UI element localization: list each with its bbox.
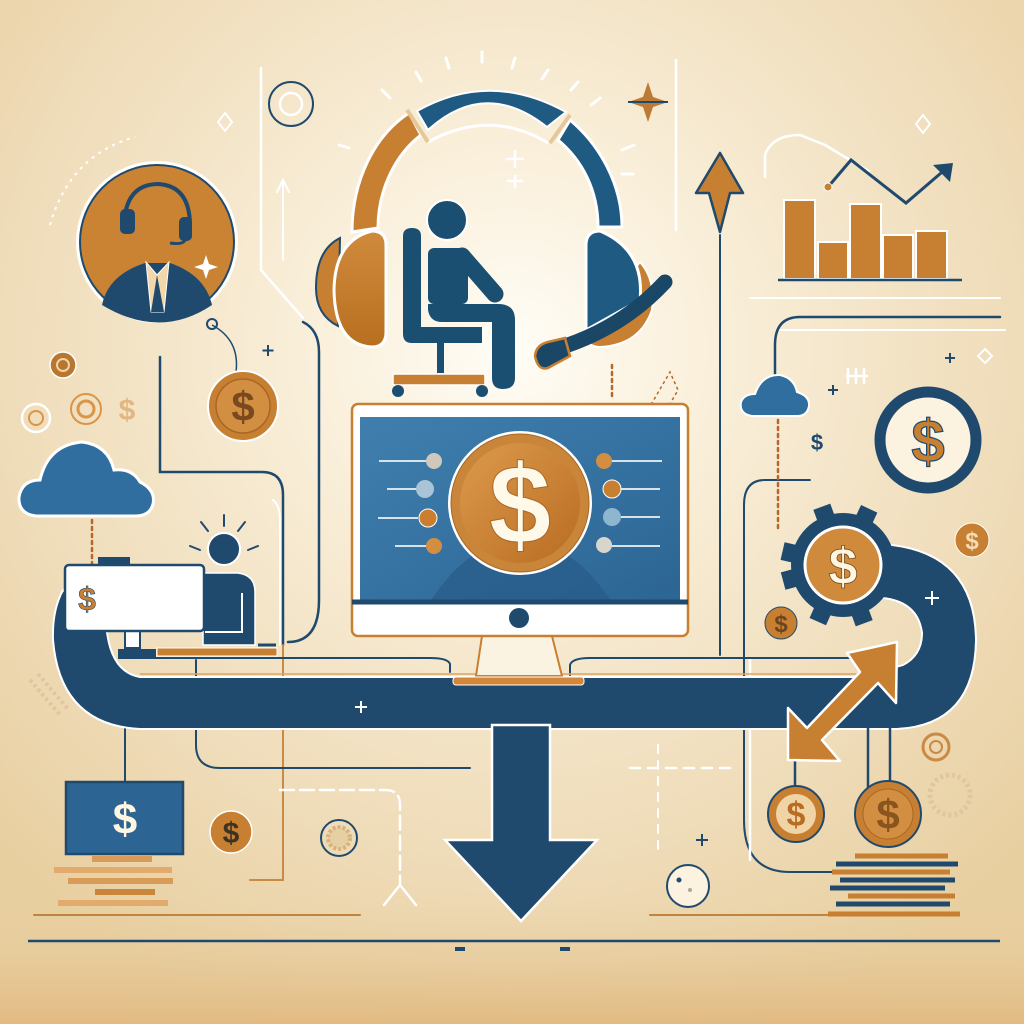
chart: bars with trend line — [765, 135, 962, 280]
icon: small coins right — [765, 430, 989, 639]
icon: cloud left — [19, 442, 153, 516]
icon: small coins right: $ — [965, 528, 979, 555]
icon: agent avatar — [50, 137, 238, 323]
icon: gear coin: $ — [829, 538, 858, 596]
sparkles and small decorations — [30, 52, 992, 907]
icon: monitor with dollar — [352, 404, 688, 685]
icon: hanging coins: $ — [787, 796, 806, 834]
icon: dollar ring — [880, 392, 976, 488]
icon: small coins left: $ — [119, 394, 136, 427]
icon: hanging coins: $ — [876, 791, 900, 838]
icon: small coins right: $ — [811, 430, 823, 455]
icon: hanging coin left: $ — [231, 383, 255, 430]
icon: small coins right: $ — [774, 611, 788, 638]
connector lines — [34, 60, 1005, 915]
icon: small coin bottom left: $ — [223, 817, 240, 850]
icon: up arrow — [696, 153, 743, 232]
icon: person at desk — [65, 515, 277, 658]
icon: coin stack right — [828, 856, 960, 914]
pipeline band — [53, 545, 976, 729]
icon: hanging coins — [768, 781, 921, 847]
icon: small coins left — [22, 352, 136, 432]
icon: large down arrow — [445, 725, 597, 921]
icon: cloud right — [741, 375, 809, 416]
icon: gear coin — [781, 504, 895, 626]
icon: monitor with dollar: $ — [489, 442, 551, 567]
icon: small coin bottom left — [210, 811, 252, 853]
icon: stacked bills left — [54, 856, 173, 906]
icon: headset with seated agent — [316, 91, 665, 397]
icon: diagonal double arrow — [788, 642, 897, 790]
icon: hanging coin left — [207, 319, 278, 441]
icon: dollar banknote: $ — [113, 795, 137, 844]
baseline — [28, 941, 1000, 951]
icon: person at desk: $ — [78, 581, 96, 617]
icon: dollar ring: $ — [911, 408, 945, 475]
icon: dollar banknote — [66, 782, 183, 854]
